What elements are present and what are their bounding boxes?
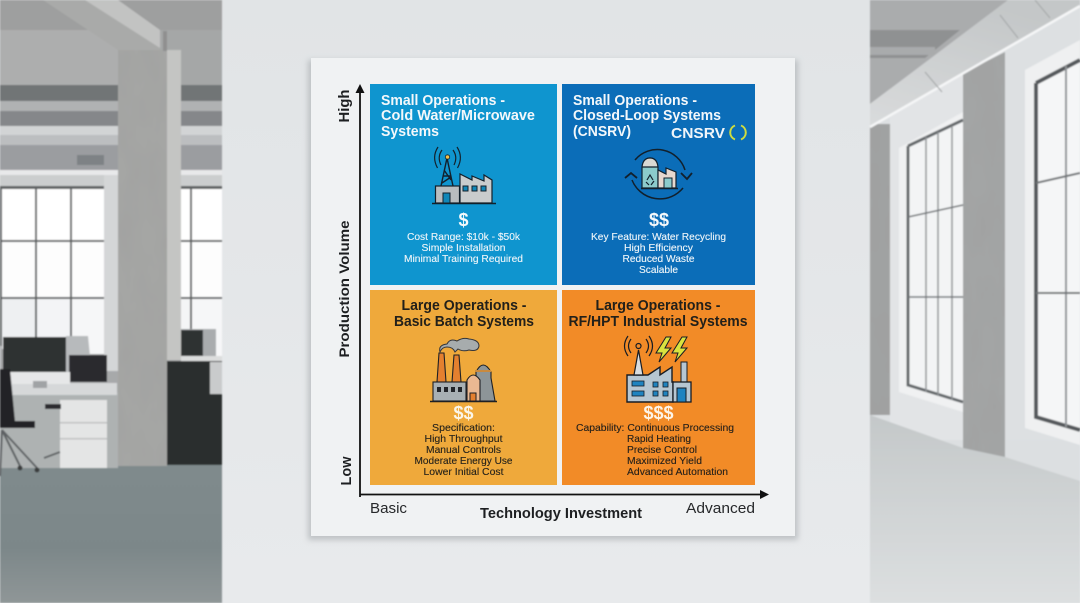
details: Key Feature: Water Recycling [591,231,726,243]
heading: Closed-Loop Systems [573,108,721,124]
details: Manual Controls [426,444,501,456]
heading: Systems [381,124,439,140]
y axis arrow [356,84,364,497]
heading: RF/HPT Industrial Systems [568,314,748,330]
right loft photo [870,0,1080,603]
duct [870,0,1080,127]
left office photo [0,0,222,603]
x axis arrow [360,490,769,499]
floor [0,465,222,603]
column [118,50,167,466]
panel: small operations closed loop [562,84,755,285]
y axis high label: High [337,90,353,122]
poster shadow [308,60,798,540]
x axis basic label: Basic [370,501,407,517]
heading: Large Operations - [402,298,527,314]
details: Lower Initial Cost [424,466,504,478]
icon: recycling plant with loop arrows [625,150,692,199]
second window [1025,40,1080,445]
details [404,231,523,265]
details: Moderate Energy Use [414,455,513,467]
heading: Small Operations - [573,93,697,109]
details: High Throughput [424,433,503,445]
cost symbol: $$ [453,403,474,423]
far column [870,124,890,415]
x axis advanced label: Advanced [686,501,755,517]
heading [573,93,721,140]
logo: CNSRV: CNSRV [671,125,725,142]
details: High Efficiency [624,242,694,254]
logo: CNSRV [671,125,746,142]
details: Capability: Continuous Processing [576,422,734,434]
x axis title: Technology Investment [480,506,642,522]
near column [963,52,1005,457]
details: Specification: [432,422,495,434]
panel: small operations cold water [370,84,557,285]
panel: large operations RF/HPT [562,290,755,485]
heading [394,298,534,330]
heading: (CNSRV) [573,124,631,140]
desk and monitors [3,337,66,375]
y axis title: Production Volume [336,220,352,358]
ceiling [870,0,1010,104]
heading: Cold Water/Microwave [381,108,535,124]
far wall [870,6,1080,440]
floor [870,415,1080,603]
details: Minimal Training Required [404,253,523,265]
details: Scalable [639,264,678,276]
cost symbol: $ [458,210,469,230]
y axis low label: Low [339,456,355,486]
heading: Basic Batch Systems [394,314,534,330]
windows [0,186,105,346]
panel: large operations basic batch [370,290,557,485]
details [576,422,734,478]
details: Reduced Waste [622,253,695,265]
icon: industrial plant with RF and lightning [624,336,691,402]
details: Rapid Heating [627,433,691,445]
icon: factory with antenna [432,147,496,204]
details: Simple Installation [422,242,506,254]
cabinet [167,361,222,465]
details [591,231,726,276]
cost symbol: $$ [649,210,669,230]
first window [899,112,963,412]
icon: factory with smoke stacks [430,338,497,402]
heading: Small Operations - [381,93,505,109]
heading [381,93,535,140]
details: Cost Range: $10k - $50k [407,231,521,243]
details: Precise Control [627,444,697,456]
poster board [311,58,795,536]
heading [568,298,748,330]
details [414,422,513,478]
details: Advanced Automation [627,466,728,478]
cost symbol: $$$ [643,403,674,423]
details: Maximized Yield [627,455,702,467]
heading: Large Operations - [596,298,721,314]
